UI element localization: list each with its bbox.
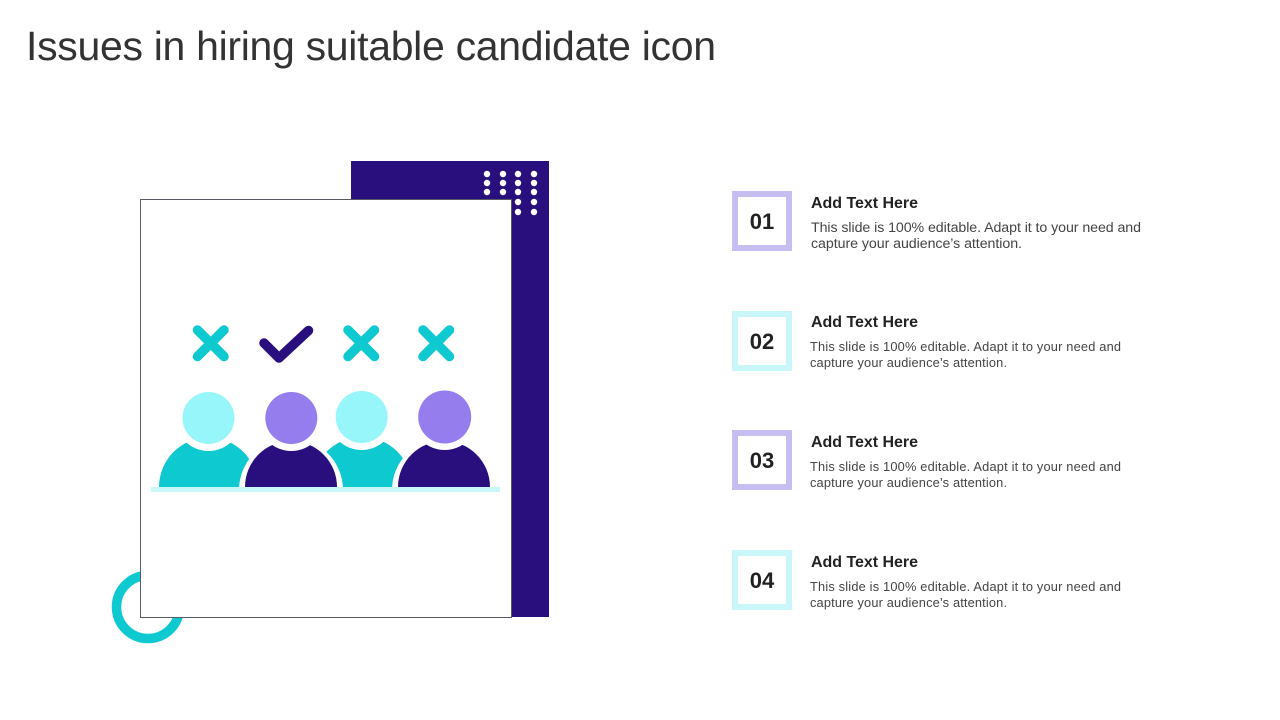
white front panel [140,200,512,618]
body 01: capture your audience’s attention. [811,236,1022,252]
person 1 [159,385,258,487]
body 02: This slide is 100% editable. Adapt it to your need and [810,339,1121,354]
number box 03 [735,433,789,487]
table line [151,487,500,492]
body 03: This slide is 100% editable. Adapt it to your need and [810,459,1121,474]
icon: cross 1 [198,330,224,356]
icon: check mark [264,330,308,358]
item 04 [735,553,1121,610]
number 01: 01 [750,209,774,234]
body 02 [810,339,1121,370]
item 03 [735,433,1121,490]
number box 01 [735,194,789,248]
item 02 [735,314,1121,370]
title: Issues in hiring suitable candidate icon [26,23,716,69]
number 02: 02 [750,329,774,354]
body 02: capture your audience’s attention. [810,355,1007,370]
number box 04 [735,553,789,607]
number 03: 03 [750,448,774,473]
heading 04: Add Text Here [811,554,918,571]
heading 01: Add Text Here [811,195,918,212]
icon: cross 3 [423,330,450,356]
body 03 [810,459,1121,490]
ring decoration [116,576,180,638]
heading 03: Add Text Here [811,434,918,451]
icon: cross 2 [348,330,374,356]
person 4 [392,384,496,490]
body 04: This slide is 100% editable. Adapt it to your need and [810,579,1121,594]
number box 02 [735,314,789,368]
body 04: capture your audience’s attention. [810,595,1007,610]
icon: candidates with marks [151,330,500,492]
person 2 [239,385,343,490]
dot grid [484,171,537,215]
person 3 [312,384,412,487]
number 04: 04 [750,568,775,593]
dark back panel [351,161,549,617]
body 01 [811,220,1141,252]
heading 02: Add Text Here [811,314,918,331]
body 01: This slide is 100% editable. Adapt it to your need and [811,220,1141,236]
body 04 [810,579,1121,610]
body 03: capture your audience’s attention. [810,475,1007,490]
item 01 [735,194,1141,252]
